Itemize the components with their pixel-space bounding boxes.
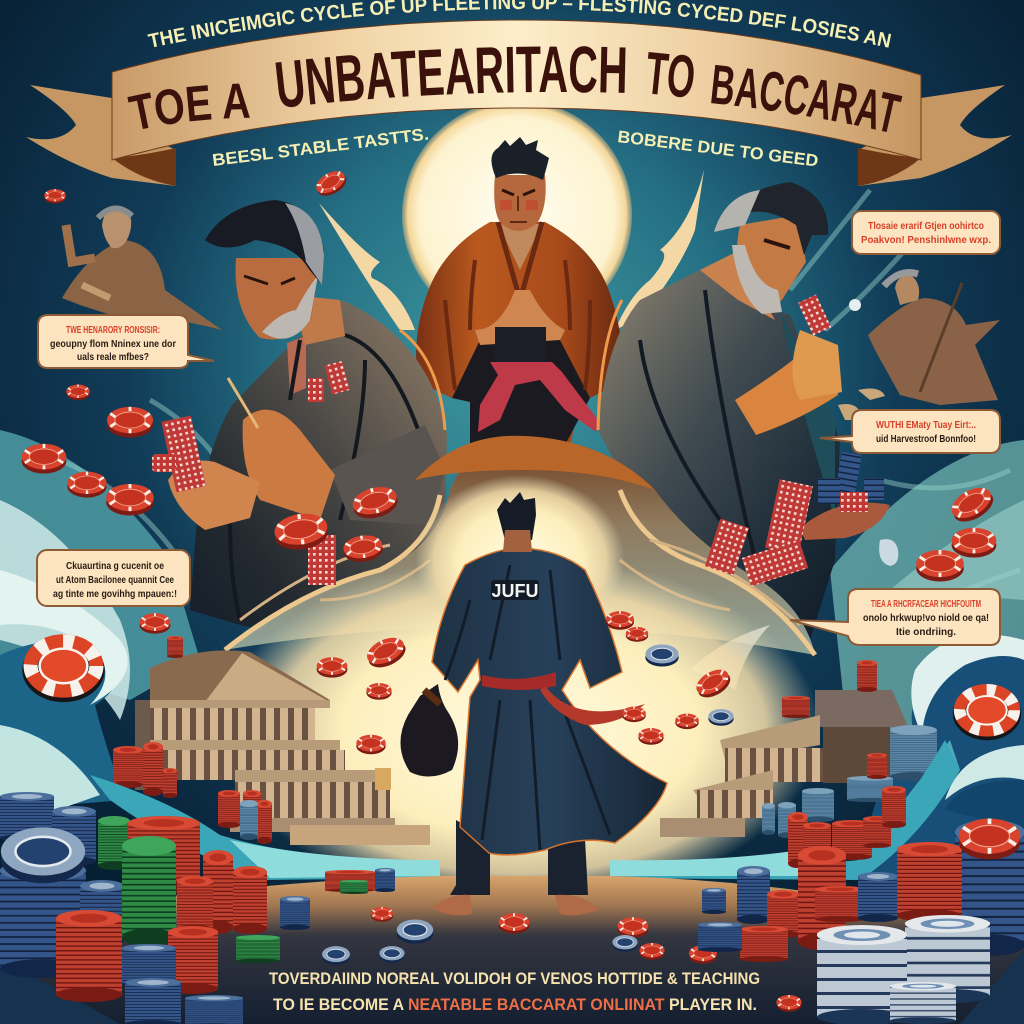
banner title: TOE A	[127, 84, 250, 129]
callout right 3: onolo hrkwup!vo niold oe qa!	[863, 613, 989, 624]
chip stack under the left man's hand	[308, 535, 336, 585]
callout right 3: Itie ondriing.	[896, 627, 956, 638]
ribbon tails	[26, 85, 1012, 186]
subtitle left: BEESL STABLE TASTTS.	[211, 125, 430, 170]
callout right 2: WUTHI EMaty Tuay Eirt:..	[876, 420, 976, 431]
front figure seen from behind: JUFU	[491, 581, 539, 601]
callout right 2: uid Harvestroof Bonnfoo!	[876, 434, 976, 445]
banner title	[127, 46, 902, 132]
callout right 2	[820, 410, 1000, 453]
halo behind central man	[402, 100, 632, 330]
front figure seen from behind	[400, 492, 667, 915]
left man with chips	[152, 200, 447, 640]
ground	[0, 876, 1024, 1024]
banner title: TO	[648, 52, 694, 98]
temple left	[135, 650, 430, 845]
small figure top left	[62, 207, 222, 330]
callout right 1: Tlosaie erarif Gtjen oohirtco	[868, 221, 984, 232]
sand swirl bell around the front figure	[225, 436, 815, 690]
callout right 1	[852, 211, 1000, 254]
banner title: UNBATEARITACH	[276, 46, 626, 108]
bottom caption: TOVERDAIIND NOREAL VOLIDOH OF VENOS HOTTIDE & TEACHING	[269, 969, 760, 988]
callout left 2: Ckuaurtina g cucenit oe	[66, 561, 164, 572]
ribbon banner band	[112, 20, 921, 160]
temple right	[660, 690, 908, 837]
flames beside the halo	[319, 170, 704, 330]
callout left 1	[38, 315, 214, 368]
callout left 2	[37, 550, 190, 606]
dark water in the lower corners	[0, 950, 1024, 1024]
bottom caption	[269, 969, 760, 1014]
callout left 2: ut Atom Bacilonee quannit Cee	[56, 575, 174, 586]
foreground chip stacks right	[698, 786, 1024, 1024]
central man in orange robe	[416, 137, 623, 445]
bottom caption: TO IE BECOME A NEATABLE BACCARAT ONLIINAT PLAYER IN.	[273, 995, 757, 1014]
banner title: BACCARAT	[711, 64, 902, 132]
callout left 1: TWE HENARORY RONSISIR:	[66, 325, 160, 336]
callout left 1: geoupny flom Nninex une dor	[50, 339, 176, 350]
callout right 1: Poakvon! Penshinlwne wxp.	[861, 235, 991, 246]
central glow	[220, 475, 820, 905]
callout left 2: ag tinte me govihhg mpauen:!	[53, 589, 177, 600]
small figure top right	[838, 272, 1000, 420]
right man	[598, 182, 898, 640]
side streaks and swirling waters	[0, 190, 1024, 880]
chips and hand of the right man	[705, 452, 890, 587]
foreground chip stacks left	[0, 792, 395, 1024]
subtitle right: BOBERE DUE TO GEED	[617, 127, 819, 171]
back chip stacks	[113, 636, 937, 844]
teal water bands in the middle	[90, 740, 960, 880]
callout right 3	[790, 589, 1000, 645]
callout left 1: uals reale mfbes?	[77, 352, 149, 363]
